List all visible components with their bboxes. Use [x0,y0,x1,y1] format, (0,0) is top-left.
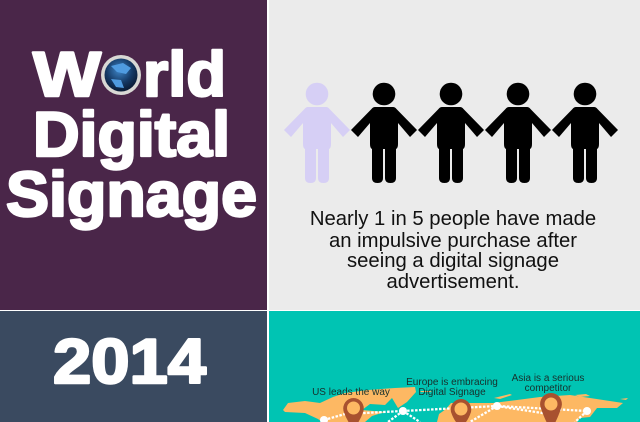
pin: Europe [451,399,471,422]
title [6,40,257,230]
icon: person 3 [418,83,484,183]
icon: globe [101,55,141,95]
map labels: Asia is a serious [512,373,584,384]
panel: map background [269,311,640,422]
icon: person 4 [485,83,551,183]
statistic text: advertisement. [386,271,520,293]
statistic text: an impulsive purchase after [329,230,577,252]
panel: statistic background [269,0,640,310]
pin: Asia [540,393,562,422]
map labels [312,373,584,398]
panel: year background [0,311,267,422]
pin: US [343,398,364,422]
title: Digital [33,100,230,170]
panel: title background [0,0,267,310]
map labels: US leads the way [312,387,390,398]
title: rld [143,40,226,110]
world map [283,387,628,422]
icon: person 2 [351,83,417,183]
map labels: Digital Signage [418,387,486,398]
map routes [324,406,587,422]
map labels: competitor [525,383,572,394]
icon: highlighted person [284,83,350,183]
map nodes [320,402,591,422]
title: W [33,40,102,110]
title: Signage [6,160,257,230]
icon: person 5 [552,83,618,183]
map labels: Europe is embracing [406,377,498,388]
statistic text: Nearly 1 in 5 people have made [310,208,596,230]
year: 2014 [53,327,206,397]
statistic text [310,208,596,293]
statistic text: seeing a digital signage [347,250,559,272]
